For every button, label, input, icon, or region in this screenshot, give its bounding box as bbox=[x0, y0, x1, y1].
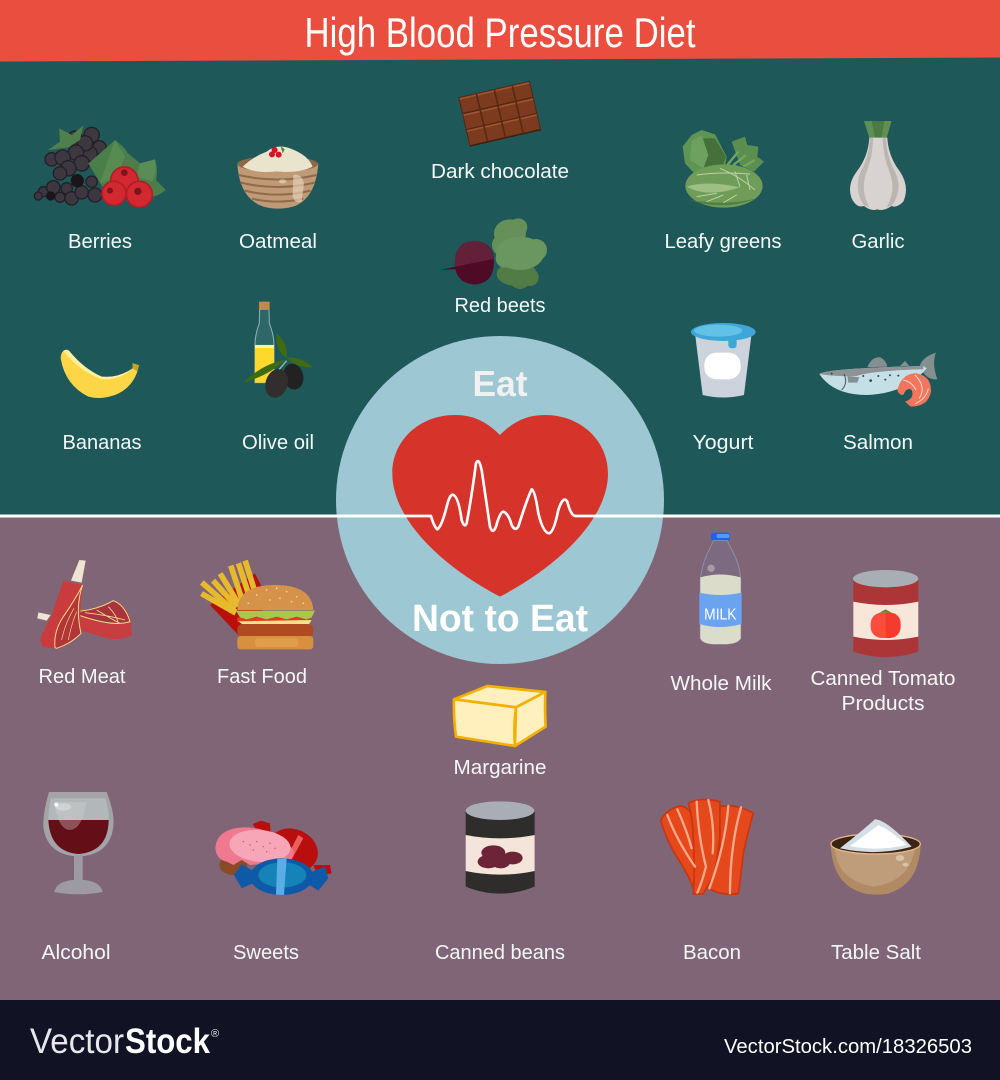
food item: table salt bbox=[831, 819, 921, 964]
logo: Vector bbox=[30, 1022, 124, 1061]
food item: yogurt bbox=[691, 323, 756, 454]
icon: salt bowl bbox=[831, 819, 921, 895]
label: fast food: Fast Food bbox=[217, 666, 307, 688]
divider line bbox=[0, 514, 1000, 518]
heading: eat: Eat bbox=[472, 363, 528, 404]
food item: salmon bbox=[819, 353, 937, 454]
label: red meat: Red Meat bbox=[38, 666, 126, 688]
label: salmon: Salmon bbox=[843, 432, 913, 454]
icon: milk bottle: MILK bbox=[704, 606, 737, 623]
food item: fast food bbox=[204, 563, 315, 688]
food item: canned beans bbox=[435, 801, 565, 964]
heading: not to eat: Not to Eat bbox=[412, 598, 588, 640]
icon: garlic bbox=[850, 121, 906, 210]
food item: whole milk bbox=[670, 533, 773, 695]
label: table salt: Table Salt bbox=[831, 942, 921, 964]
food item: olive oil bbox=[242, 302, 314, 454]
label: canned tomato products: Products bbox=[842, 693, 924, 715]
icon: milk bottle bbox=[699, 533, 742, 644]
icon: banana bbox=[61, 350, 139, 398]
label: garlic: Garlic bbox=[852, 231, 904, 253]
label: alcohol: Alcohol bbox=[42, 942, 110, 964]
icon: salmon bbox=[819, 353, 937, 407]
image id: VectorStock.com/18326503 bbox=[724, 1036, 972, 1058]
icon: yogurt bbox=[691, 323, 756, 397]
icon: red beets bbox=[440, 218, 547, 289]
logo: ® bbox=[211, 1028, 219, 1040]
icon: bacon bbox=[661, 799, 753, 894]
label: leafy greens: Leafy greens bbox=[664, 231, 782, 253]
label: margarine: Margarine bbox=[454, 757, 546, 779]
label: dark chocolate: Dark chocolate bbox=[431, 161, 569, 183]
center circle bbox=[0, 336, 1000, 664]
label: canned beans: Canned beans bbox=[435, 942, 565, 964]
food item: oatmeal bbox=[237, 146, 318, 253]
label: canned tomato products: Canned Tomato bbox=[810, 668, 956, 690]
heart with pulse bbox=[392, 415, 608, 597]
label: oatmeal: Oatmeal bbox=[239, 231, 317, 253]
food item: alcohol bbox=[42, 792, 114, 964]
food item: bananas bbox=[61, 350, 142, 454]
food item: bacon bbox=[661, 799, 753, 964]
icon: canned tomato bbox=[853, 570, 918, 657]
label: bananas: Bananas bbox=[62, 432, 142, 454]
food item: red meat bbox=[37, 560, 132, 688]
food item: red beets bbox=[440, 218, 547, 317]
food item: canned tomato products bbox=[810, 570, 956, 715]
food item: margarine bbox=[454, 686, 546, 779]
label: whole milk: Whole Milk bbox=[670, 673, 773, 695]
label: yogurt: Yogurt bbox=[692, 432, 754, 454]
pulse line bbox=[401, 461, 599, 533]
panel: eat bbox=[0, 58, 1000, 516]
panel: not to eat bbox=[0, 516, 1000, 1000]
logo bbox=[30, 1022, 219, 1061]
icon: fast food bbox=[204, 563, 315, 649]
label: olive oil: Olive oil bbox=[242, 432, 314, 454]
icon: margarine bbox=[454, 686, 546, 746]
label: bacon: Bacon bbox=[683, 942, 741, 964]
label: red beets: Red beets bbox=[454, 295, 546, 317]
icon: canned beans bbox=[466, 801, 535, 894]
food item: berries bbox=[34, 126, 166, 253]
icon: berries bbox=[34, 126, 166, 207]
icon: red meat bbox=[37, 560, 132, 648]
logo: Stock bbox=[125, 1022, 210, 1061]
food item: dark chocolate bbox=[431, 81, 569, 183]
footer bar bbox=[0, 1000, 1000, 1080]
label: berries: Berries bbox=[68, 231, 132, 253]
label: sweets: Sweets bbox=[233, 942, 299, 964]
icon: olive oil bbox=[243, 302, 313, 401]
food item: leafy greens bbox=[664, 130, 782, 253]
icon: sweets bbox=[215, 821, 332, 895]
icon: oatmeal bbox=[237, 146, 318, 209]
icon: wine glass bbox=[43, 792, 114, 894]
header banner bbox=[0, 0, 1000, 62]
title: High Blood Pressure Diet bbox=[304, 9, 696, 56]
label: canned tomato products bbox=[810, 668, 956, 715]
food item: sweets bbox=[215, 821, 332, 964]
icon: dark chocolate bbox=[458, 81, 541, 147]
icon: leafy greens bbox=[683, 130, 764, 208]
food item: garlic bbox=[850, 121, 906, 253]
